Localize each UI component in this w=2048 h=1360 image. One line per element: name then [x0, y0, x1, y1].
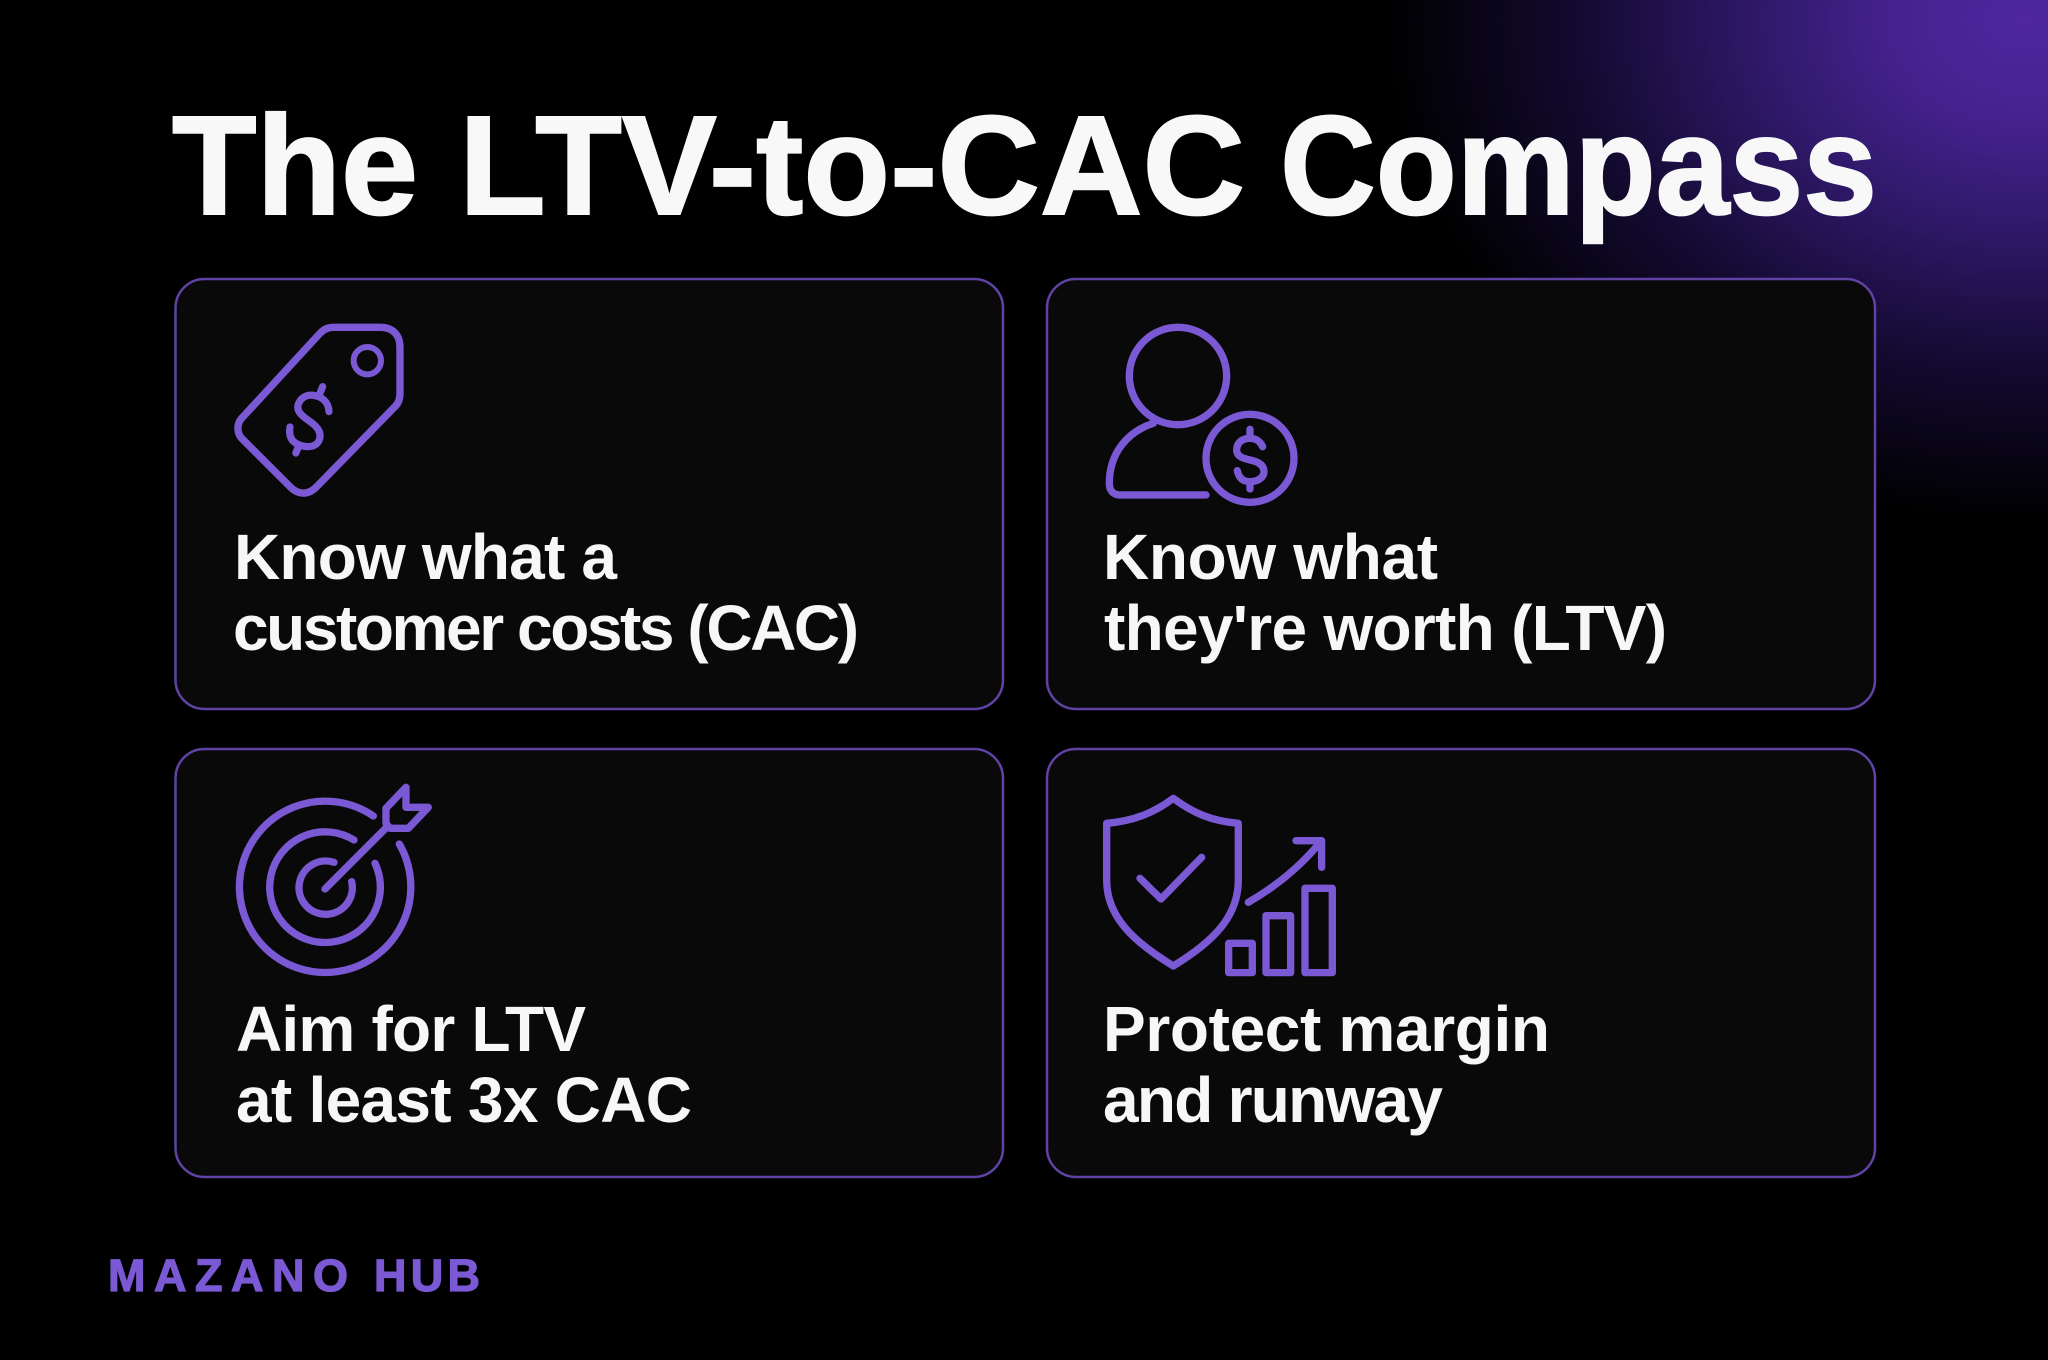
panel: aim for 3x — [176, 749, 1003, 1177]
icon: target with arrow — [239, 787, 428, 972]
card text — [1103, 521, 1667, 664]
card text: Know what a — [234, 521, 617, 593]
title: The — [172, 86, 418, 244]
card text: and runway — [1103, 1064, 1443, 1136]
card text — [236, 993, 692, 1136]
brand wordmark: HUB — [374, 1250, 480, 1301]
panel: know what they are worth — [1047, 279, 1875, 709]
icon: person with dollar coin — [1109, 327, 1294, 502]
card text: Protect margin — [1103, 993, 1550, 1065]
card text: Know what — [1103, 521, 1438, 593]
card text — [233, 521, 859, 664]
card text: they're worth (LTV) — [1104, 592, 1667, 664]
title — [172, 86, 1877, 244]
card text: Aim for LTV — [236, 993, 586, 1065]
title: Compass — [1280, 86, 1877, 244]
icon: price tag with dollar sign — [238, 327, 400, 493]
card text — [1103, 993, 1550, 1136]
title: LTV-to-CAC — [459, 86, 1245, 244]
icon: shield with check and growth bars — [1107, 798, 1332, 973]
brand wordmark: MAZANO — [108, 1250, 348, 1301]
brand wordmark — [108, 1250, 480, 1301]
panel: protect margin and runway — [1047, 749, 1875, 1177]
panel: know what a customer costs — [176, 279, 1003, 709]
card text: at least 3x CAC — [236, 1064, 692, 1136]
card text: customer costs (CAC) — [233, 592, 859, 664]
